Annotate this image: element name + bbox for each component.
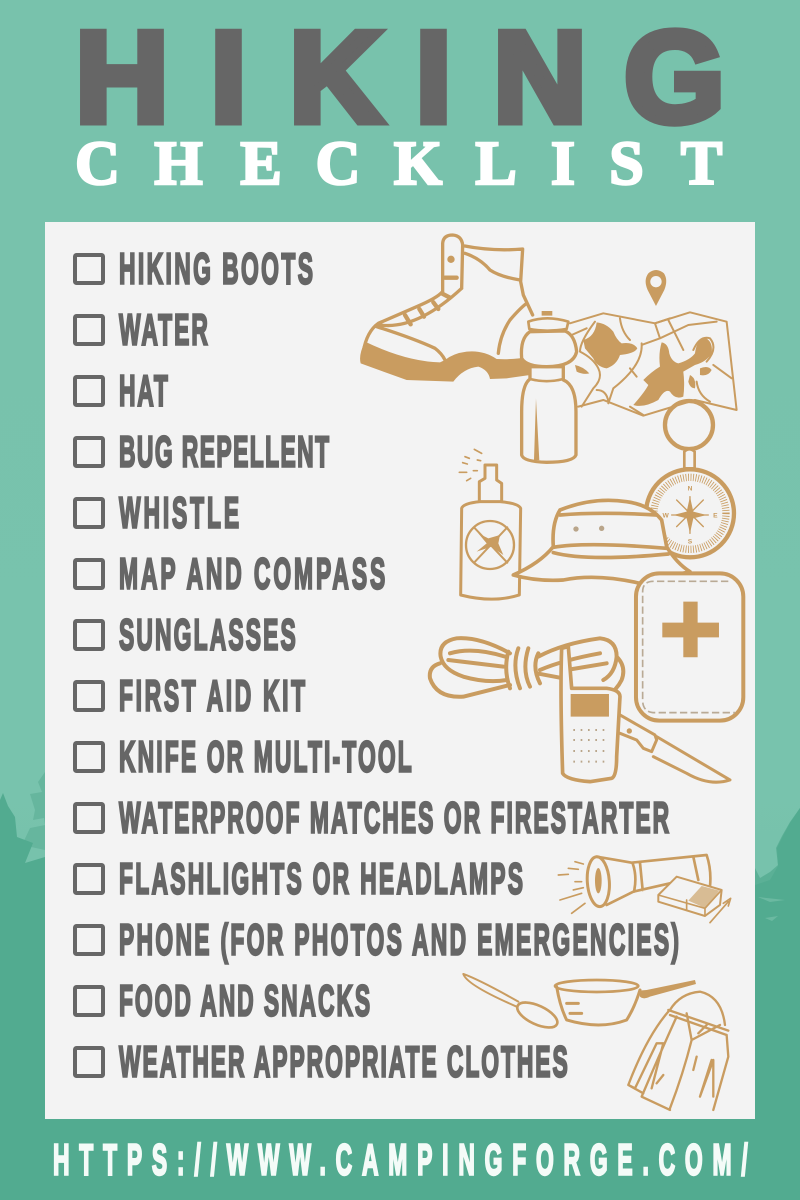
icon: compass: N: [688, 486, 693, 493]
icon: compass: W: [662, 512, 669, 519]
icon: hiking boot: [360, 235, 533, 382]
item: waterproof matches or firestarter: WATERPROOF MATCHES OR FIRESTARTER: [119, 794, 669, 843]
checklist items: [75, 245, 679, 1087]
item: phone: PHONE (FOR PHOTOS AND EMERGENCIES): [119, 916, 679, 965]
subtitle: CHECKLIST: CHECKLIST: [75, 130, 722, 198]
item: bug repellent: BUG REPELLENT: [119, 428, 329, 477]
item: hiking boots: HIKING BOOTS: [119, 245, 313, 294]
item: hat: [75, 367, 168, 416]
item: map and compass: MAP AND COMPASS: [119, 550, 385, 599]
icon: compass: S: [688, 538, 693, 545]
forest silhouette: [0, 772, 800, 1200]
item: water: WATER: [119, 306, 208, 355]
icon: bug repellent spray: [459, 449, 521, 599]
icon: water bottle: [521, 311, 577, 462]
icon: map with pin: [570, 270, 737, 416]
icon: pan: [555, 980, 696, 1025]
item: flashlights or headlamps: FLASHLIGHTS OR HEADLAMPS: [119, 855, 523, 904]
item: hat: HAT: [119, 367, 168, 416]
item: sunglasses: SUNGLASSES: [119, 611, 296, 660]
item: whistle: WHISTLE: [119, 489, 239, 538]
icon: compass: [646, 401, 734, 557]
title: HIKING: HIKING: [75, 6, 725, 150]
icon: matchbox: [658, 877, 731, 923]
icon: knife: [620, 715, 730, 782]
icon: jacket: [628, 992, 728, 1110]
icon: flashlight: [558, 855, 710, 913]
icon: compass: E: [713, 512, 718, 519]
icon: whistle: [561, 647, 620, 782]
item: weather appropriate clothes: WEATHER APPROPRIATE CLOTHES: [119, 1038, 568, 1087]
item: food and snacks: FOOD AND SNACKS: [119, 977, 370, 1026]
footer url: HTTPS://WWW.CAMPINGFORGE.COM/: [53, 1136, 748, 1185]
icon: rope: [430, 638, 623, 697]
item: first aid kit: FIRST AID KIT: [119, 672, 306, 721]
icon: spoon: [463, 974, 561, 1033]
panel: checklist card: [45, 222, 755, 1119]
item: knife or multi-tool: KNIFE OR MULTI-TOOL: [119, 733, 412, 782]
icon: bucket hat: [513, 500, 690, 583]
icon: first aid kit: [636, 573, 743, 721]
item: water: [75, 306, 208, 355]
